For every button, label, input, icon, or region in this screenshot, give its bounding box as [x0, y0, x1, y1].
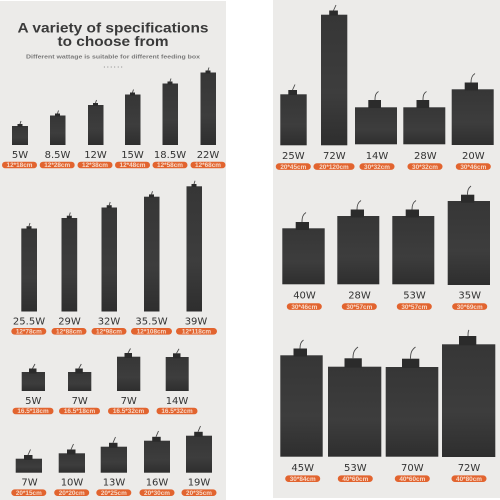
- mat: 40W 30x46: 40W: [293, 290, 316, 302]
- mat: 7W 16.5x18: 7W: [72, 396, 88, 407]
- mat: 35.5W 12x108: 12*108cm: [137, 328, 167, 336]
- mat: 7W 16.5x32: 16.5*32cm: [113, 408, 144, 415]
- mat: 15W 12x48: [115, 90, 150, 169]
- mat: 25W 20x45: 20*45cm: [280, 164, 307, 171]
- mat: 18.5W 12x58: 18.5W: [154, 150, 186, 161]
- mat: 72W 40x80: 72W: [458, 463, 480, 474]
- mat: 14W 30x32: 30*32cm: [364, 164, 390, 171]
- mat: 8.5W 12x28: 8.5W: [45, 150, 71, 161]
- mat: 22W 12x68: [190, 68, 226, 169]
- mat: 35.5W 12x108: [131, 191, 172, 336]
- mat: 28W 30x32: 30*32cm: [412, 164, 438, 171]
- mat: 28W 30x32: 28W: [414, 151, 437, 162]
- mat: 19W 20x35: 19W: [188, 478, 210, 488]
- mat: 28W 30x57: [337, 200, 379, 311]
- mat: 19W 20x35: 20*35cm: [186, 490, 212, 497]
- mat: 53W 40x60: 53W: [344, 463, 367, 474]
- mat: 72W 40x80: [442, 330, 495, 483]
- mat: 12W 12x38: [78, 100, 112, 169]
- mat: 70W 40x60: [386, 347, 438, 483]
- mat: 20W 30x46: 20W: [462, 151, 485, 162]
- mat: 70W 40x60: 70W: [401, 463, 424, 474]
- mat: 22W 12x68: 22W: [197, 150, 219, 161]
- mat: 25.5W 12x78: [11, 223, 46, 336]
- mat: 5W 12x18: 5W: [12, 150, 28, 161]
- mat: 20W 30x46: [452, 74, 494, 171]
- mat: 14W 16.5x32: [156, 349, 198, 415]
- panel: left background: [0, 1, 226, 500]
- mat: 45W 30x84: 30*84cm: [290, 476, 316, 483]
- mat: 10W 20x20: 20*20cm: [59, 490, 85, 497]
- mat: 28W 30x57: 28W: [348, 290, 371, 302]
- mat: 39W 12x118: 12*118cm: [182, 328, 211, 336]
- mat: 45W 30x84: [280, 340, 323, 483]
- mat: 22W 12x68: 12*68cm: [195, 162, 221, 169]
- mat: 7W 16.5x32: 7W: [121, 396, 137, 407]
- mat: 39W 12x118: 39W: [185, 316, 207, 328]
- mat: 25W 20x45: [276, 84, 311, 171]
- subtitle: Different wattage is suitable for different feeding box: [26, 54, 201, 60]
- mat: 32W 12x98: [92, 202, 126, 336]
- mat: 13W 20x25: 20*25cm: [101, 490, 127, 497]
- mat: 14W 30x32: 14W: [366, 151, 388, 162]
- mat: 13W 20x25: [96, 437, 131, 497]
- mat: 12W 12x38: 12W: [84, 150, 107, 161]
- mat: 5W 16.5x18: 16.5*18cm: [17, 408, 49, 415]
- mat: 35W 30x69: [448, 186, 490, 311]
- mat: 5W 12x18: 12*18cm: [7, 162, 33, 169]
- mat: 7W 16.5x18: [59, 364, 100, 415]
- mat: 25.5W 12x78: 12*78cm: [16, 328, 42, 336]
- mat: 7W 16.5x32: [108, 348, 149, 415]
- mat: 5W 16.5x18: [12, 364, 54, 415]
- mat: 70W 40x60: 40*60cm: [399, 476, 426, 483]
- mat: 45W 30x84: 45W: [291, 463, 314, 474]
- mat: 10W 20x20: 10W: [61, 478, 83, 488]
- mat: 72W 20x120: 20*120cm: [319, 164, 349, 171]
- title: [18, 19, 209, 49]
- mat: 28W 30x32: [403, 92, 445, 171]
- mat: 8.5W 12x28: 12*28cm: [44, 162, 70, 169]
- mat: 29W 12x88: 29W: [58, 316, 81, 328]
- mat: 5W 16.5x18: 5W: [25, 396, 42, 407]
- mat: 20W 30x46: 30*46cm: [460, 164, 487, 171]
- mat: 25W 20x45: 25W: [282, 151, 305, 162]
- mat: 15W 12x48: 12*48cm: [120, 162, 146, 169]
- mat: 40W 30x46: 30*46cm: [291, 304, 318, 311]
- mat: 18.5W 12x58: 12*58cm: [157, 162, 183, 169]
- mat: 53W 40x60: 40*60cm: [342, 476, 369, 483]
- mat: 32W 12x98: 32W: [98, 316, 120, 328]
- title: to choose from: [58, 33, 168, 49]
- mat: 35W 30x69: 35W: [458, 290, 481, 302]
- mat: 53W 30x57: 53W: [403, 290, 426, 302]
- mat: 72W 20x120: [314, 5, 354, 171]
- mat: 19W 20x35: [182, 426, 216, 497]
- mat: 53W 30x57: [392, 200, 434, 311]
- mat: 5W 12x18: [2, 121, 37, 169]
- mat: 25.5W 12x78: 25.5W: [13, 316, 45, 328]
- mat: 28W 30x57: 30*57cm: [346, 304, 373, 311]
- mat: 7W 20x15: 7W: [21, 478, 38, 488]
- mat: 13W 20x25: 13W: [103, 478, 125, 488]
- mat: 72W 20x120: 72W: [323, 151, 346, 162]
- mat: 8.5W 12x28: [40, 110, 75, 169]
- mat: 16W 20x30: 16W: [146, 478, 168, 488]
- dots: ......: [104, 64, 123, 70]
- title: A variety of specifications: [18, 19, 209, 35]
- mat: 53W 40x60: [328, 347, 381, 483]
- mat: 16W 20x30: [140, 431, 174, 497]
- mat: 35.5W 12x108: 35.5W: [135, 316, 168, 328]
- mat: 16W 20x30: 20*30cm: [144, 490, 170, 497]
- mat: 35W 30x69: 30*69cm: [457, 304, 483, 311]
- mat: 12W 12x38: 12*38cm: [82, 162, 108, 169]
- panel: right background: [273, 0, 500, 498]
- mat: 15W 12x48: 15W: [121, 150, 144, 161]
- mat: 18.5W 12x58: [152, 78, 188, 169]
- mat: 10W 20x20: [54, 444, 89, 497]
- mat: 14W 30x32: [355, 92, 397, 171]
- mat: 7W 20x15: 20*15cm: [16, 490, 42, 497]
- mat: 72W 40x80: 40*80cm: [456, 476, 482, 483]
- mat: 53W 30x57: 30*57cm: [401, 304, 428, 311]
- mat: 29W 12x88: 12*88cm: [56, 328, 82, 336]
- mat: 7W 16.5x18: 16.5*18cm: [64, 408, 95, 415]
- mat: 32W 12x98: 12*98cm: [96, 328, 122, 336]
- mat: 29W 12x88: [52, 212, 86, 336]
- mat: 14W 16.5x32: 16.5*32cm: [161, 408, 193, 415]
- mat: 39W 12x118: [176, 181, 217, 336]
- mat: 40W 30x46: [282, 212, 325, 311]
- mat: 7W 20x15: [11, 450, 46, 497]
- mat: 14W 16.5x32: 14W: [166, 396, 188, 407]
